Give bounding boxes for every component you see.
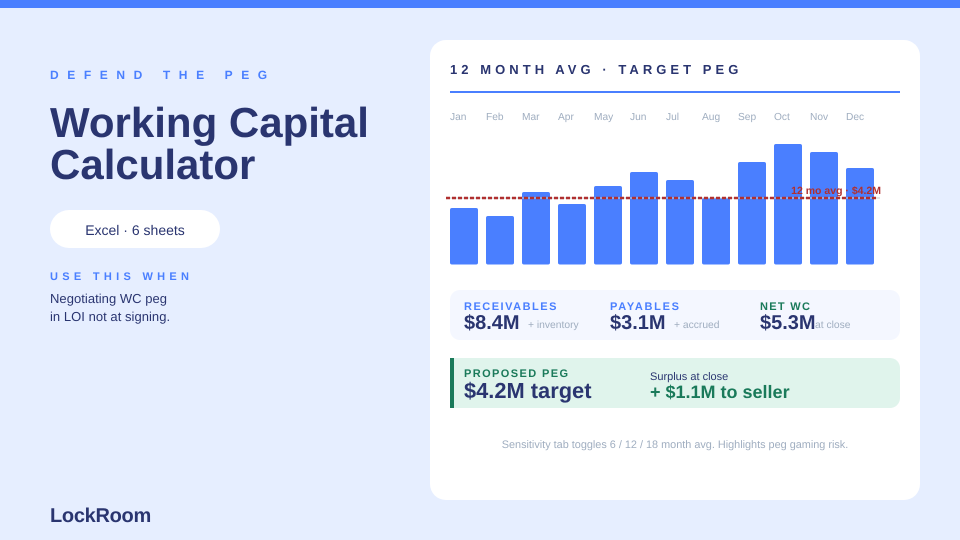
metric: receivables: + inventory [528, 320, 579, 331]
month labels: Jan [450, 112, 466, 123]
average line [446, 197, 880, 199]
card heading: 12 MONTH AVG · TARGET PEG [450, 62, 742, 76]
month labels: Nov [810, 112, 829, 123]
text: use case: Negotiating WC peg [50, 291, 167, 306]
label: use this when: USE THIS WHEN [50, 271, 193, 283]
surplus at close [650, 371, 790, 402]
month labels: Dec [846, 112, 864, 123]
month labels: Feb [486, 112, 504, 123]
metric: net WC [760, 300, 850, 334]
average label: 12 mo avg · $4.2M [791, 185, 881, 197]
pill: Excel 6 sheets: Excel · 6 sheets [85, 222, 185, 238]
panel: metrics [450, 290, 900, 340]
proposed peg value: PROPOSED PEG [464, 368, 569, 380]
panel: chart card [430, 40, 920, 500]
metric: receivables: $8.4M [464, 312, 520, 334]
footnote: Sensitivity tab toggles 6 / 12 / 18 month avg. Highlights peg gaming risk. [502, 438, 848, 450]
metric: net WC: at close [815, 320, 850, 331]
month labels [450, 112, 864, 123]
metric: payables: $3.1M [610, 312, 666, 334]
metric: payables: + accrued [674, 320, 720, 331]
month labels: Oct [774, 112, 790, 123]
title: Working Capital [50, 99, 369, 146]
month labels: Aug [702, 112, 720, 123]
text: use case: in LOI not at signing. [50, 309, 170, 324]
month labels: Mar [522, 112, 540, 123]
bar chart [446, 112, 881, 264]
metric: receivables: RECEIVABLES [464, 300, 558, 312]
text: use case [50, 291, 170, 324]
surplus at close: + $1.1M to seller [650, 382, 790, 402]
heading rule [450, 91, 900, 93]
eyebrow: defend the peg: DEFEND THE PEG [50, 68, 276, 82]
title [50, 99, 369, 188]
month labels: Jun [630, 112, 646, 123]
metric: net WC: $5.3M [760, 312, 816, 334]
metric: payables [610, 300, 720, 334]
logo: LockRoom: LockRoom [50, 504, 151, 526]
month labels: Sep [738, 112, 756, 123]
panel: proposed peg [450, 358, 900, 408]
metric: payables: PAYABLES [610, 300, 681, 312]
proposed peg value: $4.2M target [464, 378, 591, 402]
metric: receivables [464, 300, 579, 334]
green accent bar [450, 358, 454, 408]
pill: Excel 6 sheets [50, 210, 220, 248]
metric: net WC: NET WC [760, 300, 811, 312]
month labels: Jul [666, 112, 679, 123]
bars [450, 144, 874, 264]
title: Calculator [50, 141, 255, 188]
surplus at close: Surplus at close [650, 371, 728, 383]
top accent bar [0, 0, 960, 8]
month labels: Apr [558, 112, 574, 123]
month labels: May [594, 112, 614, 123]
